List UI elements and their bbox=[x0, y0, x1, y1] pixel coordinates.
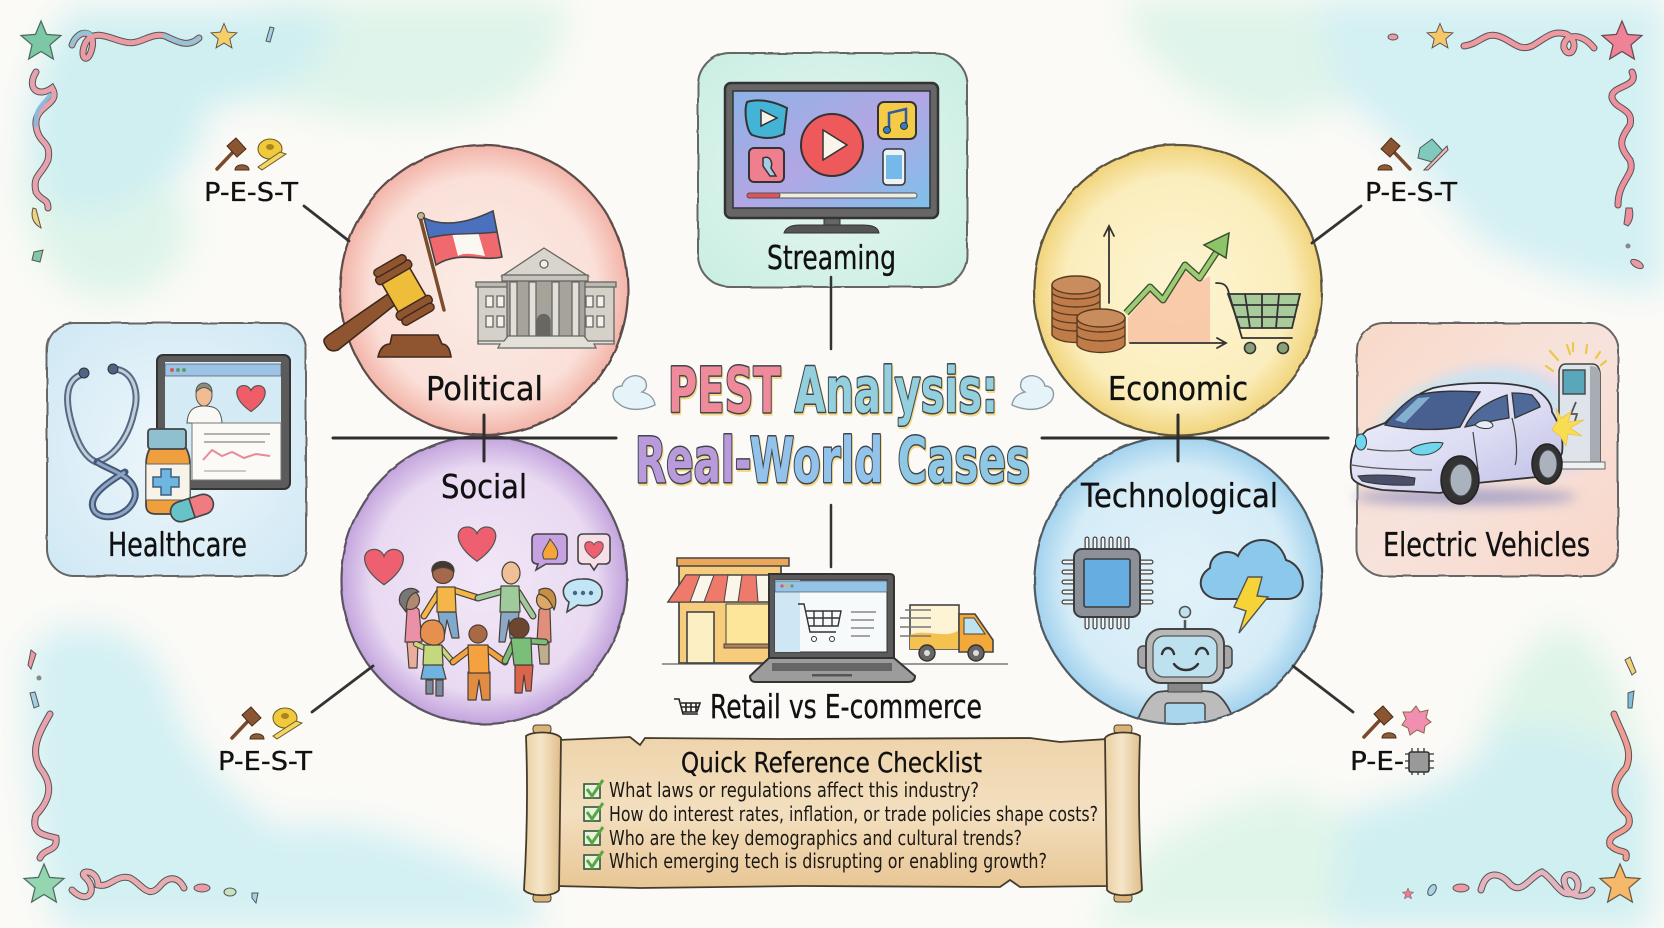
corner decoration: top left bbox=[21, 21, 274, 262]
person: back right bbox=[478, 562, 533, 642]
panel: electric vehicles case bbox=[1351, 323, 1618, 576]
icon: small chip bbox=[1405, 748, 1434, 775]
title line 1: PEST Analysis: bbox=[668, 354, 998, 427]
icon: electric car bbox=[1351, 383, 1584, 504]
title bbox=[613, 354, 1054, 497]
panel: technological circle bbox=[1034, 436, 1322, 731]
decorative: ground line bbox=[662, 663, 1008, 665]
icon: gavel and burst bbox=[1364, 706, 1431, 738]
checklist item 1: What laws or regulations affect this industry? bbox=[609, 778, 979, 802]
icon: hearts bbox=[365, 527, 496, 585]
corner decoration: bottom left bbox=[24, 650, 258, 903]
person: front right bbox=[505, 618, 545, 693]
icon: stethoscope bbox=[68, 364, 136, 517]
title line 2: Real-World Cases bbox=[635, 424, 1030, 497]
icon: gavel and gem bbox=[1378, 138, 1448, 170]
icon: gavel and coin bbox=[217, 138, 286, 170]
person: back left bbox=[424, 562, 478, 640]
icon: social media bubbles bbox=[532, 534, 610, 612]
panel: economic circle bbox=[1034, 145, 1322, 435]
text: P-E-S-T: P-E-S-T bbox=[204, 178, 298, 208]
connector: title to retail bbox=[830, 505, 832, 567]
label: Social: Social bbox=[441, 467, 527, 506]
text: Retail vs E-commerce: Retail vs E-commerce bbox=[710, 687, 982, 726]
label: Retail vs E-commerce bbox=[674, 687, 982, 726]
connector: economic to tag bbox=[1312, 206, 1361, 243]
icon: laptop with online cart bbox=[750, 574, 915, 682]
decorative: left roller bbox=[524, 725, 561, 902]
label: Electric Vehicles: Electric Vehicles bbox=[1383, 525, 1590, 564]
icon: television with media apps bbox=[725, 83, 938, 233]
label: Healthcare: Healthcare bbox=[108, 525, 247, 564]
icon: microchip bbox=[1064, 539, 1151, 627]
panel: political circle bbox=[324, 145, 628, 435]
person: front left bbox=[416, 620, 452, 696]
label: Political: Political bbox=[426, 369, 543, 408]
checklist item 4: Which emerging tech is disrupting or enabling growth? bbox=[609, 849, 1047, 873]
icon: tablet with telehealth screen bbox=[157, 355, 290, 489]
connector: social to tag bbox=[312, 666, 373, 712]
icon: charging station bbox=[1546, 343, 1606, 469]
icon: gavel and coin bbox=[232, 707, 302, 739]
panel: healthcare case bbox=[47, 323, 306, 576]
chart: rising price area bbox=[1104, 226, 1229, 348]
icon: cloud with lightning bbox=[1201, 540, 1303, 633]
connector: streaming to title bbox=[830, 277, 832, 349]
checklist item 2: How do interest rates, inflation, or trade policies shape costs? bbox=[609, 802, 1098, 826]
icon: robot bbox=[1137, 606, 1233, 723]
icon: small cart bbox=[674, 699, 700, 714]
text: P-E-: P-E- bbox=[1350, 747, 1404, 777]
label: Technological: Technological bbox=[1080, 476, 1278, 515]
corner decoration: top right bbox=[1388, 21, 1645, 271]
person: far left bbox=[399, 588, 422, 668]
icon: right cloud bbox=[1012, 376, 1054, 409]
person: front center bbox=[453, 625, 505, 700]
text: P-E-S-T: P-E-S-T bbox=[218, 747, 312, 777]
icon: gavel bbox=[324, 252, 451, 357]
icon: truck bbox=[900, 605, 993, 661]
icon: flag bbox=[418, 211, 502, 310]
heading: checklist title: Quick Reference Checklist bbox=[681, 746, 982, 779]
panel: streaming case bbox=[698, 53, 967, 287]
tag: electric vehicles P-E-S-T bbox=[1365, 138, 1457, 208]
label: Economic: Economic bbox=[1108, 369, 1248, 408]
icon: shopping cart bbox=[1216, 283, 1300, 354]
decorative: parchment sheet bbox=[556, 737, 1108, 888]
icon: government building bbox=[476, 248, 616, 348]
icon: storefront bbox=[668, 558, 789, 663]
tag: streaming/social P-E-S-T bbox=[218, 707, 312, 777]
icon: coin stacks bbox=[1052, 276, 1125, 352]
corner decoration: bottom right bbox=[1402, 657, 1640, 902]
label: Streaming: Streaming bbox=[767, 238, 896, 277]
checklist item 3: Who are the key demographics and cultural trends? bbox=[609, 826, 1022, 850]
icon: left cloud bbox=[613, 376, 655, 409]
illustration: people in a circle bbox=[399, 562, 556, 700]
panel: quick reference checklist scroll bbox=[524, 725, 1142, 902]
tag: technology P-E-chip bbox=[1350, 706, 1434, 777]
text: P-E-S-T: P-E-S-T bbox=[1365, 178, 1457, 208]
person: far right bbox=[536, 588, 556, 664]
decorative: right roller bbox=[1105, 725, 1142, 902]
axis: left cross divider bbox=[333, 415, 616, 461]
connector: political to tag bbox=[304, 206, 349, 241]
connector: technological to tag bbox=[1293, 666, 1353, 712]
axis: right cross divider bbox=[1042, 415, 1328, 461]
panel: social circle bbox=[341, 436, 627, 724]
panel: retail vs e-commerce case bbox=[662, 558, 1008, 726]
tag: healthcare P-E-S-T bbox=[204, 138, 298, 208]
decorative: pastel glow behind car bbox=[1353, 366, 1590, 505]
icon: medicine bottle and capsule bbox=[146, 429, 216, 524]
